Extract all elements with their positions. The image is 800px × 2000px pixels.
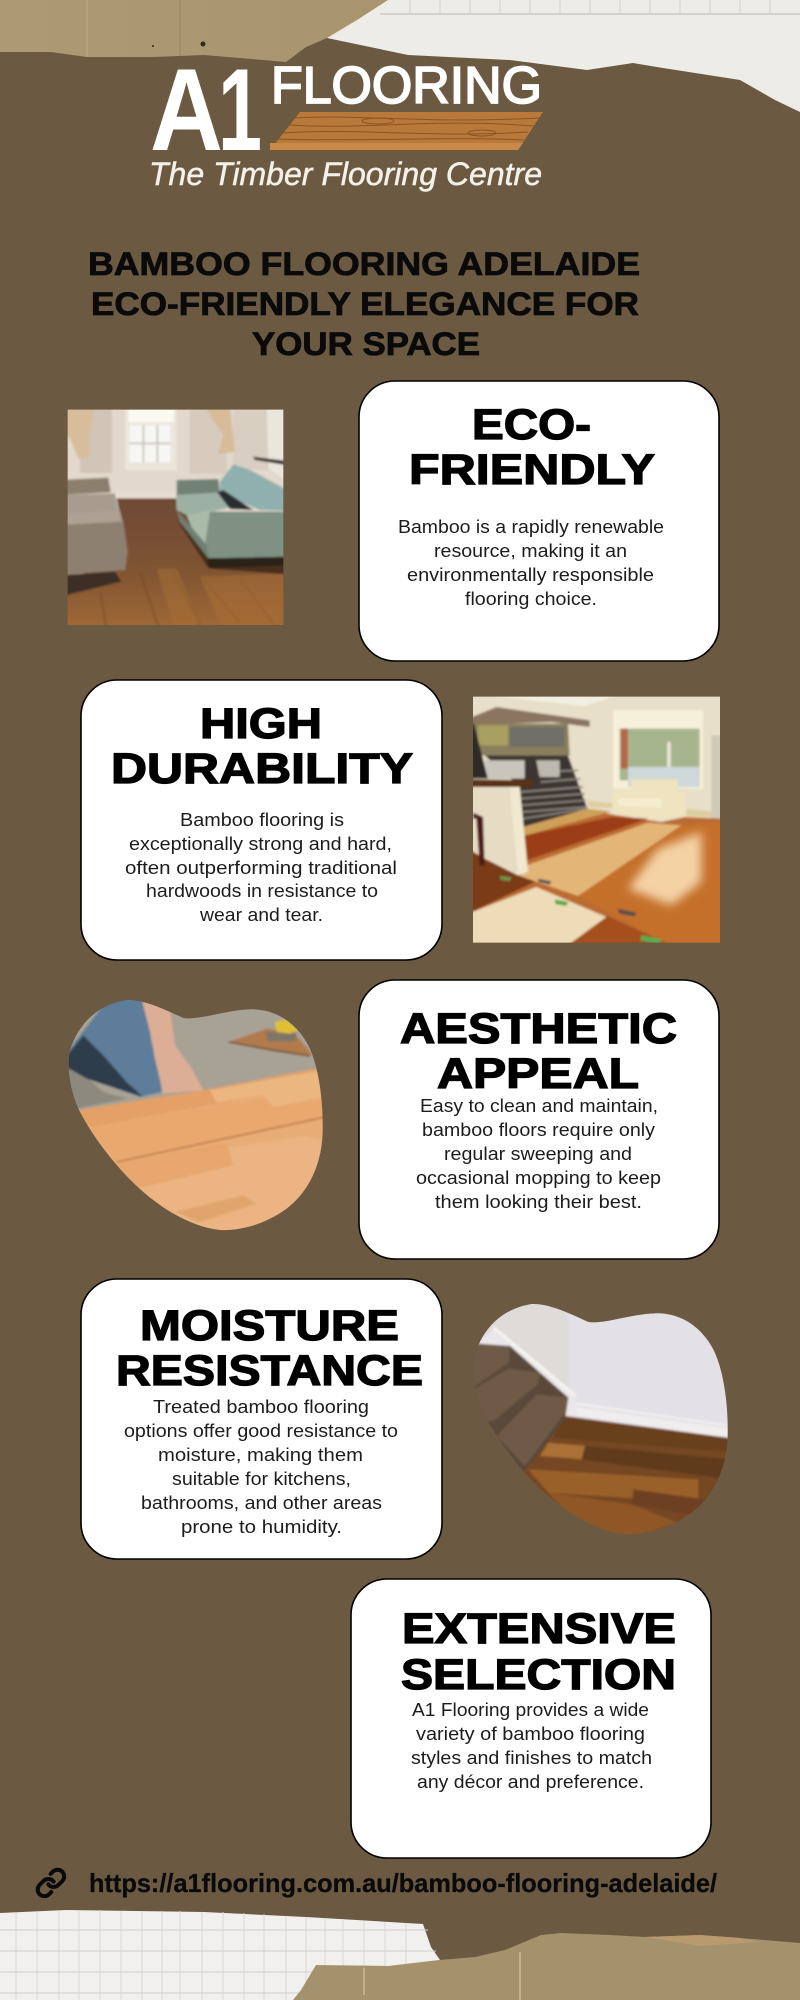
body text: often outperforming traditional <box>125 858 397 878</box>
floor reflection glare <box>628 832 701 905</box>
heading: SELECTION <box>401 1651 676 1699</box>
body text: moisture, making them <box>158 1445 363 1465</box>
title <box>88 246 640 362</box>
heading <box>400 1005 677 1098</box>
body text: bathrooms, and other areas <box>141 1493 382 1513</box>
wood plank icon <box>270 112 543 150</box>
body text <box>125 810 397 925</box>
heading: RESISTANCE <box>116 1347 423 1395</box>
body text <box>124 1397 398 1537</box>
body text: flooring choice. <box>465 589 597 609</box>
card: eco-friendly <box>359 381 719 661</box>
body text: styles and finishes to match <box>411 1748 652 1768</box>
body text: bamboo floors require only <box>422 1120 655 1140</box>
card: extensive selection <box>351 1579 711 1858</box>
heading <box>111 700 413 793</box>
body text <box>416 1096 661 1212</box>
body text: options offer good resistance to <box>124 1421 398 1441</box>
heading: ECO- <box>472 401 591 449</box>
card: high durability <box>81 680 442 960</box>
body text: Easy to clean and maintain, <box>420 1096 658 1116</box>
photo: showroom with glossy floor <box>468 692 725 949</box>
photo blob: installing wooden planks <box>68 1000 323 1230</box>
heading: AESTHETIC <box>400 1005 677 1053</box>
torn cardboard bottom right <box>293 1933 800 2000</box>
heading <box>409 401 655 494</box>
photo blob: stairs and wood floor <box>476 1304 728 1534</box>
torn white paper top right <box>327 0 800 112</box>
heading: APPEAL <box>437 1050 639 1098</box>
heading <box>116 1302 423 1395</box>
heading: DURABILITY <box>111 745 413 793</box>
heading: FRIENDLY <box>409 446 655 494</box>
logo wordmark FLOORING: FLOORING <box>271 57 542 115</box>
body text: wear and tear. <box>199 905 323 925</box>
body text: any décor and preference. <box>417 1772 644 1792</box>
heading: EXTENSIVE <box>402 1605 676 1653</box>
torn cardboard top left <box>0 0 388 62</box>
body text <box>411 1700 652 1792</box>
body text: occasional mopping to keep <box>416 1168 661 1188</box>
logo tagline: The Timber Flooring Centre <box>149 156 542 192</box>
title: ECO-FRIENDLY ELEGANCE FOR <box>91 286 639 322</box>
body text: Bamboo is a rapidly renewable <box>398 517 664 537</box>
title: YOUR SPACE <box>252 326 480 362</box>
body text: Bamboo flooring is <box>180 810 344 830</box>
heading <box>401 1605 676 1699</box>
icon: link <box>38 1870 64 1896</box>
body text: exceptionally strong and hard, <box>129 834 392 854</box>
photo: living room with sofas <box>68 410 284 625</box>
body text: Treated bamboo flooring <box>153 1397 369 1417</box>
logo <box>149 44 543 192</box>
torn grid paper bottom left <box>0 1910 440 2000</box>
logo wordmark A1: A <box>150 44 223 175</box>
heading: HIGH <box>200 700 322 748</box>
body text: A1 Flooring provides a wide <box>412 1700 649 1720</box>
body text: regular sweeping and <box>444 1144 632 1164</box>
heading: MOISTURE <box>140 1302 399 1350</box>
title: BAMBOO FLOORING ADELAIDE <box>88 246 640 282</box>
body text: hardwoods in resistance to <box>146 881 378 901</box>
body text <box>398 517 664 609</box>
body text: environmentally responsible <box>407 565 654 585</box>
card: aesthetic appeal <box>359 980 719 1259</box>
logo wordmark A1: 1 <box>218 44 262 175</box>
body text: resource, making it an <box>434 541 627 561</box>
card: moisture resistance <box>81 1279 442 1559</box>
body text: prone to humidity. <box>181 1517 342 1537</box>
website url: https://a1flooring.com.au/bamboo-flooring-adelaide/ <box>89 1868 717 1898</box>
body text: suitable for kitchens, <box>172 1469 351 1489</box>
body text: variety of bamboo flooring <box>416 1724 645 1744</box>
body text: them looking their best. <box>435 1192 642 1212</box>
